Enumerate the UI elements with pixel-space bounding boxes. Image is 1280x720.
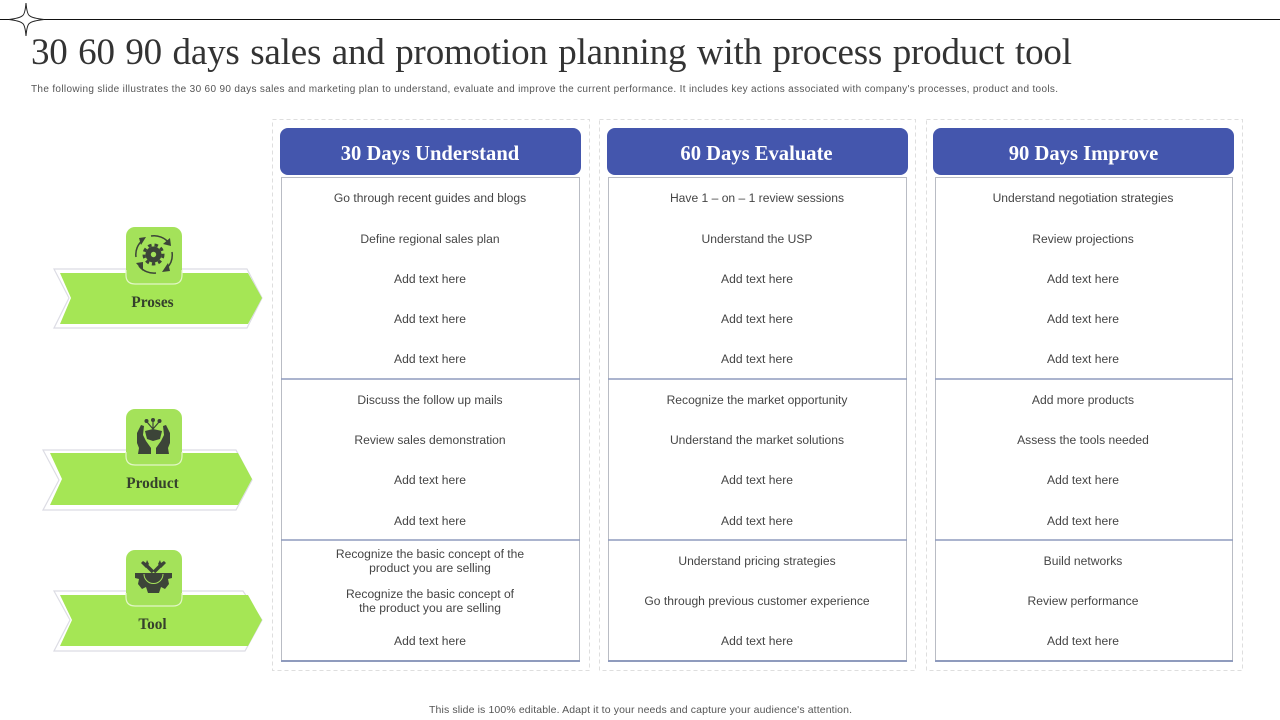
- header: 90 Days Improve: [933, 128, 1234, 175]
- row label: Product: [43, 409, 252, 510]
- arrow: Tool: [60, 595, 262, 646]
- table: 90 days: Add text here: [1047, 473, 1119, 487]
- label: Product: Product: [126, 475, 180, 492]
- table: 60 days: Understand pricing strategies: [678, 554, 836, 568]
- table: 60 days: [608, 178, 907, 662]
- icon: hands holding box: [126, 409, 182, 465]
- arrow: Product outline: [43, 450, 252, 510]
- table: 60 days: Add text here: [721, 352, 793, 366]
- header: 30 Days Understand: 30 Days Understand: [341, 143, 520, 165]
- table: 60 days: Add text here: [721, 514, 793, 528]
- table: 60 days: Understand the market solutions: [670, 433, 844, 447]
- table: 60 days: Have 1 – on – 1 review sessions: [670, 191, 844, 205]
- table: 60 days: Understand the USP: [702, 232, 812, 246]
- header: 60 Days Evaluate: 60 Days Evaluate: [680, 143, 833, 165]
- table: 60 days: Add text here: [721, 634, 793, 648]
- row label: Proses: [54, 227, 262, 328]
- label: Tool: Tool: [138, 616, 167, 633]
- top rule with star: [0, 3, 1280, 36]
- panel: 90 Days Improve: [926, 120, 1242, 670]
- table: 90 days: Review projections: [1032, 232, 1134, 246]
- subtitle: The following slide illustrates the 30 60 90 days sales and marketing plan to understand, evaluate and improve the current performance. It includes key actions associated with company's processes, product and tools.: [31, 84, 1058, 95]
- icon: wrench and gear: [126, 550, 182, 606]
- table: 60 days: Add text here: [721, 473, 793, 487]
- table: 90 days: [935, 178, 1233, 662]
- table: 30 days: product you are selling: [369, 561, 491, 575]
- panel: 30 Days Understand: [272, 120, 590, 670]
- arrow: Product: [50, 453, 252, 505]
- table: 30 days: the product you are selling: [359, 601, 501, 615]
- table: 30 days: Add text here: [394, 634, 466, 648]
- table: 60 days: Add text here: [721, 272, 793, 286]
- table: 90 days: Review performance: [1028, 594, 1139, 608]
- table: 30 days: Add text here: [394, 514, 466, 528]
- table: 90 days: Add text here: [1047, 352, 1119, 366]
- table: 30 days: Define regional sales plan: [360, 232, 500, 246]
- table: 90 days: Add text here: [1047, 312, 1119, 326]
- arrow: Proses: [60, 273, 262, 324]
- footer note: This slide is 100% editable. Adapt it to your needs and capture your audience's attention.: [429, 704, 852, 716]
- row label: Tool: [54, 550, 262, 651]
- table: 30 days: Go through recent guides and blogs: [334, 191, 526, 205]
- header: 30 Days Understand: [280, 128, 581, 175]
- table: 30 days: Add text here: [394, 312, 466, 326]
- table: 90 days: Add more products: [1032, 393, 1134, 407]
- table: 90 days: Understand negotiation strategies: [993, 191, 1173, 205]
- icon: gear with cycle arrows: [126, 227, 182, 284]
- table: 30 days: Review sales demonstration: [354, 433, 506, 447]
- arrow: Tool outline: [54, 591, 262, 651]
- table: 30 days: Add text here: [394, 473, 466, 487]
- table: 30 days: Recognize the basic concept of the: [336, 547, 524, 561]
- table: 30 days: [281, 178, 580, 662]
- table: 30 days: Discuss the follow up mails: [357, 393, 503, 407]
- table: 90 days: Add text here: [1047, 272, 1119, 286]
- table: 90 days: Add text here: [1047, 514, 1119, 528]
- table: 60 days: Go through previous customer experience: [644, 594, 870, 608]
- table: 30 days: Recognize the basic concept of: [346, 587, 515, 601]
- table: 30 days: Add text here: [394, 272, 466, 286]
- table: 90 days: Add text here: [1047, 634, 1119, 648]
- header: 90 Days Improve: 90 Days Improve: [1009, 143, 1158, 165]
- arrow: Proses outline: [54, 269, 262, 328]
- table: 90 days: Assess the tools needed: [1017, 433, 1149, 447]
- title: 30 60 90 days sales and promotion planning with process product tool: [31, 32, 1072, 73]
- table: 90 days: Build networks: [1044, 554, 1122, 568]
- label: Proses: Proses: [131, 294, 174, 311]
- table: 60 days: Recognize the market opportunity: [667, 393, 848, 407]
- table: 30 days: Add text here: [394, 352, 466, 366]
- table: 60 days: Add text here: [721, 312, 793, 326]
- panel: 60 Days Evaluate: [600, 120, 916, 670]
- header: 60 Days Evaluate: [607, 128, 908, 175]
